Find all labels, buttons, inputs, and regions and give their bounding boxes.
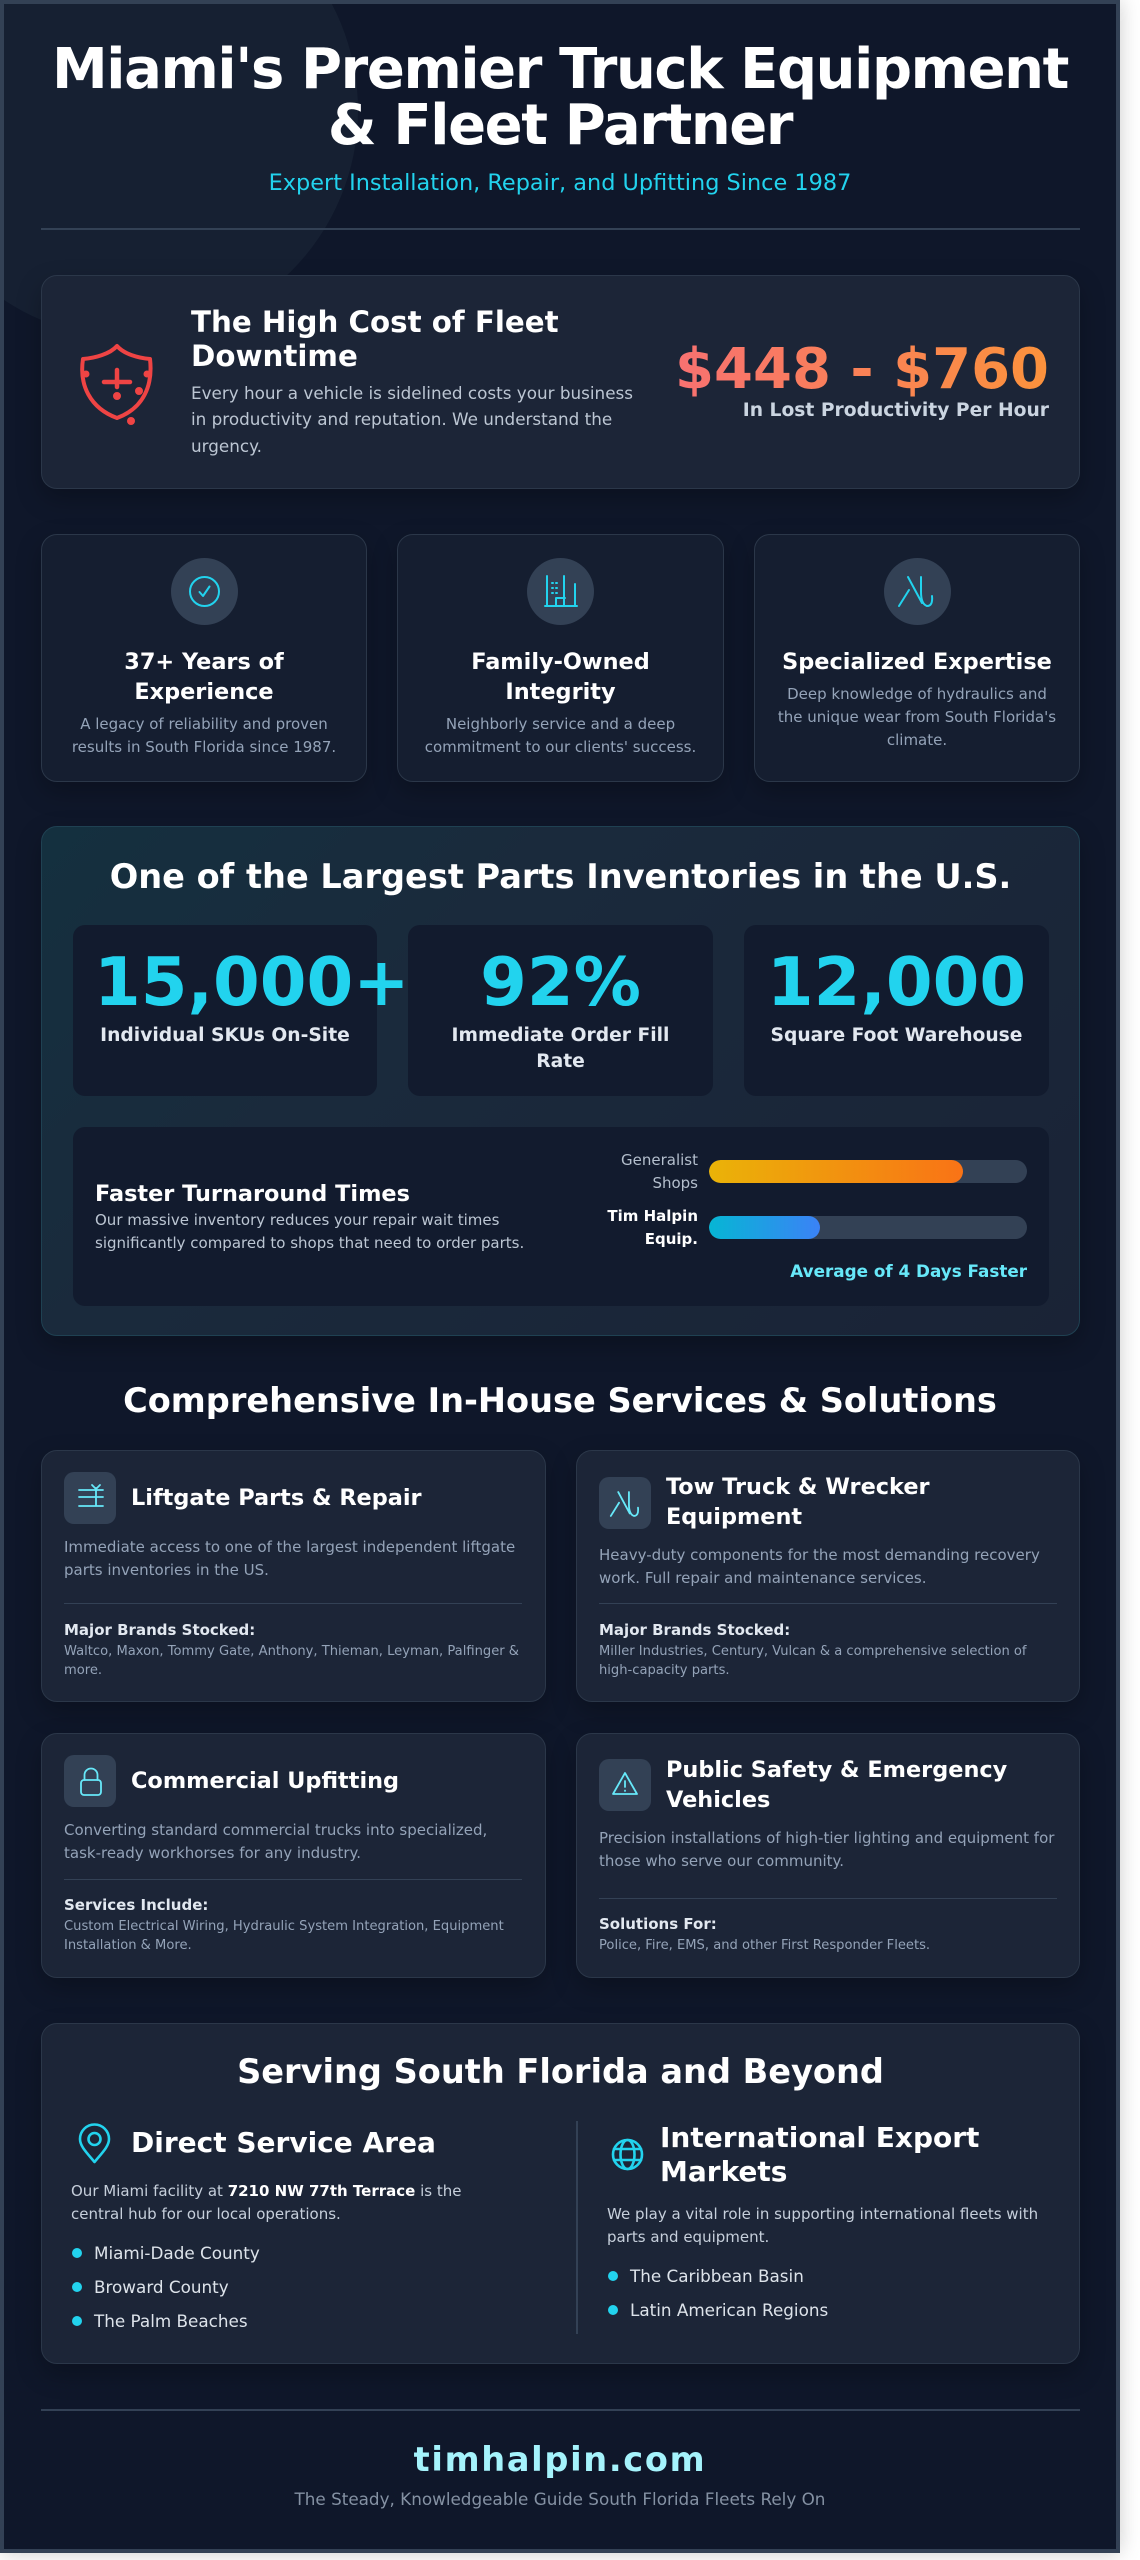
decorative corner circle	[0, 0, 358, 338]
stat: lost productivity figure: $448 - $760	[675, 337, 1049, 402]
panel: family owned	[397, 534, 724, 782]
list: export regions	[608, 2266, 828, 2320]
text: experience: A legacy of reliability and proven	[80, 715, 328, 733]
text: public safety: Precision installations of high-tier lighting and equipment for	[599, 1829, 1054, 1847]
panel: liftgate	[41, 1450, 546, 1702]
text: solutions for: Police, Fire, EMS, and other First Responder Fleets.	[599, 1938, 930, 1953]
heading: public safety: Vehicles	[666, 1787, 770, 1813]
label: services include: Services Include:	[64, 1896, 208, 1914]
text: commercial upfitting: task-ready workhorses for any industry.	[64, 1844, 361, 1862]
heading: experience: 37+ Years of	[124, 649, 284, 675]
heading: family owned: Family-Owned	[471, 649, 650, 675]
text: services include: Installation & More.	[64, 1938, 192, 1953]
text: liftgate	[64, 1538, 515, 1578]
text: public safety: those who serve our community.	[599, 1852, 844, 1870]
label: lost productivity: In Lost Productivity Per Hour	[743, 400, 1049, 421]
heading: international	[660, 2121, 979, 2188]
text: experience: results in South Florida since 1987.	[72, 738, 336, 756]
heading: tow truck	[666, 1474, 930, 1530]
label: generalist shops: Generalist	[621, 1151, 698, 1169]
heading: family owned	[471, 649, 650, 705]
icon: tow hook	[599, 1477, 651, 1529]
heading: high cost	[191, 305, 559, 373]
text: family owned: commitment to our clients' success.	[425, 738, 696, 756]
text: international	[607, 2205, 1038, 2246]
icon: lock	[64, 1755, 116, 1807]
number: 92%: 92%	[480, 943, 641, 1021]
text: faster turnaround: Our massive inventory reduces your repair wait times	[95, 1211, 499, 1229]
panel: service area	[41, 2023, 1080, 2364]
footer tagline: The Steady, Knowledgeable Guide South Florida Fleets Rely On	[295, 2489, 825, 2509]
label: liftgate brands: Major Brands Stocked:	[64, 1621, 255, 1639]
panel: experience	[41, 534, 367, 782]
text: direct service	[71, 2182, 461, 2222]
text: direct service: Our Miami facility at 7210 NW 77th Terrace is the	[71, 2182, 461, 2200]
label: tow brands: Major Brands Stocked:	[599, 1621, 790, 1639]
heading: international: Markets	[660, 2155, 787, 2188]
text: liftgate brands: Waltco, Maxon, Tommy Gate, Anthony, Thieman, Leyman, Palfinger &	[64, 1644, 519, 1659]
heading: tow truck: Tow Truck & Wrecker	[666, 1474, 930, 1500]
text: services include: Custom Electrical Wiring, Hydraulic System Integration, Equipment	[64, 1919, 504, 1934]
heading: high cost: Downtime	[191, 339, 358, 373]
stat: fill rate	[408, 925, 713, 1096]
text: public safety	[599, 1829, 1054, 1870]
label: SKUs: Individual SKUs On-Site	[100, 1025, 350, 1046]
label: fill rate: Immediate Order Fill	[452, 1025, 669, 1046]
text: high cost body	[191, 383, 633, 456]
heading: faster turnaround: Faster Turnaround Times	[95, 1181, 410, 1207]
text: experience	[72, 715, 336, 756]
label: tim halpin: Equip.	[645, 1230, 698, 1248]
footer url: timhalpin.com	[414, 2440, 706, 2479]
text: liftgate: Immediate access to one of the largest independent liftgate	[64, 1538, 515, 1556]
heading: experience: Experience	[134, 679, 274, 705]
panel: tow truck	[576, 1450, 1080, 1702]
label: generalist shops	[621, 1151, 698, 1192]
icon: map pin	[78, 2123, 110, 2164]
text: direct service: central hub for our local operations.	[71, 2204, 341, 2222]
text: liftgate: parts inventories in the US.	[64, 1560, 269, 1578]
heading: liftgate: Liftgate Parts & Repair	[131, 1485, 422, 1511]
label: fill rate: Rate	[536, 1051, 585, 1072]
heading: service area: Serving South Florida and Beyond	[237, 2052, 884, 2091]
number: 15,000+: 15,000+	[94, 943, 410, 1021]
text: liftgate brands: more.	[64, 1663, 102, 1678]
text: tow brands: Miller Industries, Century, Vulcan & a comprehensive selection of	[599, 1644, 1027, 1659]
list: counties: Miami-Dade County	[94, 2243, 260, 2263]
text: international: parts and equipment.	[607, 2228, 769, 2246]
subtitle: Expert Installation, Repair, and Upfitting Since 1987	[269, 170, 851, 196]
list: counties	[72, 2243, 260, 2331]
label: tim halpin: Tim Halpin	[607, 1207, 698, 1225]
panel: specialized expertise	[754, 534, 1080, 782]
text: tow brands: high-capacity parts.	[599, 1663, 730, 1678]
heading: public safety: Public Safety & Emergency	[666, 1757, 1007, 1783]
heading: services: Comprehensive In-House Services & Solutions	[123, 1381, 997, 1420]
label: warehouse: Square Foot Warehouse	[771, 1025, 1022, 1046]
bar: tim halpin	[709, 1216, 1027, 1239]
text: high cost body: in productivity and reputation. We understand the	[191, 409, 612, 429]
stat: SKUs	[73, 925, 377, 1096]
text: specialized expertise: climate.	[887, 731, 947, 749]
number: 12,000: 12,000	[767, 943, 1026, 1021]
text: liftgate brands	[64, 1644, 519, 1678]
icon: building	[527, 558, 594, 625]
icon: check circle	[171, 558, 238, 625]
text: services include	[64, 1919, 504, 1953]
label: solutions for: Solutions For:	[599, 1915, 717, 1933]
heading: specialized expertise: Specialized Expertise	[782, 649, 1052, 675]
text: tow truck	[599, 1546, 1040, 1586]
text: specialized expertise	[778, 685, 1056, 749]
text: commercial upfitting: Converting standard commercial trucks into specialized,	[64, 1821, 487, 1839]
text: high cost body: Every hour a vehicle is sidelined costs your business	[191, 383, 633, 403]
label: tim halpin	[607, 1207, 698, 1248]
heading: tow truck: Equipment	[666, 1504, 802, 1530]
text: tow brands	[599, 1644, 1027, 1678]
stat: warehouse	[744, 925, 1049, 1096]
list: export regions: Latin American Regions	[630, 2300, 828, 2320]
list: export regions: The Caribbean Basin	[630, 2266, 804, 2286]
text: international: We play a vital role in supporting international fleets with	[607, 2205, 1038, 2223]
title	[52, 37, 1068, 158]
heading: high cost: The High Cost of Fleet	[191, 305, 559, 339]
panel: parts inventory	[41, 826, 1080, 1336]
heading: public safety	[666, 1757, 1007, 1813]
panel: commercial upfitting	[41, 1733, 546, 1978]
icon: globe	[612, 2138, 644, 2170]
callout: 4 days faster: Average of 4 Days Faster	[790, 1261, 1027, 1281]
label: fill rate	[452, 1025, 669, 1072]
title: Miami's Premier Truck Equipment	[52, 37, 1068, 102]
heading: direct service: Direct Service Area	[131, 2126, 436, 2159]
title: & Fleet Partner	[328, 93, 792, 158]
text: faster turnaround: significantly compared to shops that need to order parts.	[95, 1234, 524, 1252]
icon: wrench hook	[884, 558, 951, 625]
text: family owned	[425, 715, 696, 756]
text: tow truck: Heavy-duty components for the most demanding recovery	[599, 1546, 1040, 1564]
text: high cost body: urgency.	[191, 436, 262, 456]
heading: family owned: Integrity	[505, 679, 616, 705]
heading: experience	[124, 649, 284, 705]
label: generalist shops: Shops	[652, 1174, 698, 1192]
bar: generalist shops	[709, 1160, 1027, 1183]
list: counties: Broward County	[94, 2277, 229, 2297]
heading: international: International Export	[660, 2121, 979, 2154]
list: counties: The Palm Beaches	[94, 2311, 248, 2331]
panel: high cost of downtime	[41, 275, 1080, 489]
icon: alert triangle	[599, 1759, 651, 1811]
icon: liftgate	[64, 1472, 116, 1524]
text: specialized expertise: Deep knowledge of hydraulics and	[787, 685, 1047, 703]
text: faster turnaround	[95, 1211, 524, 1252]
panel: public safety	[576, 1733, 1080, 1978]
text: commercial upfitting	[64, 1821, 487, 1862]
text: family owned: Neighborly service and a deep	[446, 715, 675, 733]
text: specialized expertise: the unique wear from South Florida's	[778, 708, 1056, 726]
text: tow truck: work. Full repair and maintenance services.	[599, 1568, 926, 1586]
heading: parts inventory: One of the Largest Parts Inventories in the U.S.	[110, 857, 1011, 896]
panel: faster turnaround	[73, 1127, 1049, 1306]
heading: commercial upfitting: Commercial Upfitting	[131, 1768, 399, 1794]
icon: red shield	[80, 344, 153, 425]
